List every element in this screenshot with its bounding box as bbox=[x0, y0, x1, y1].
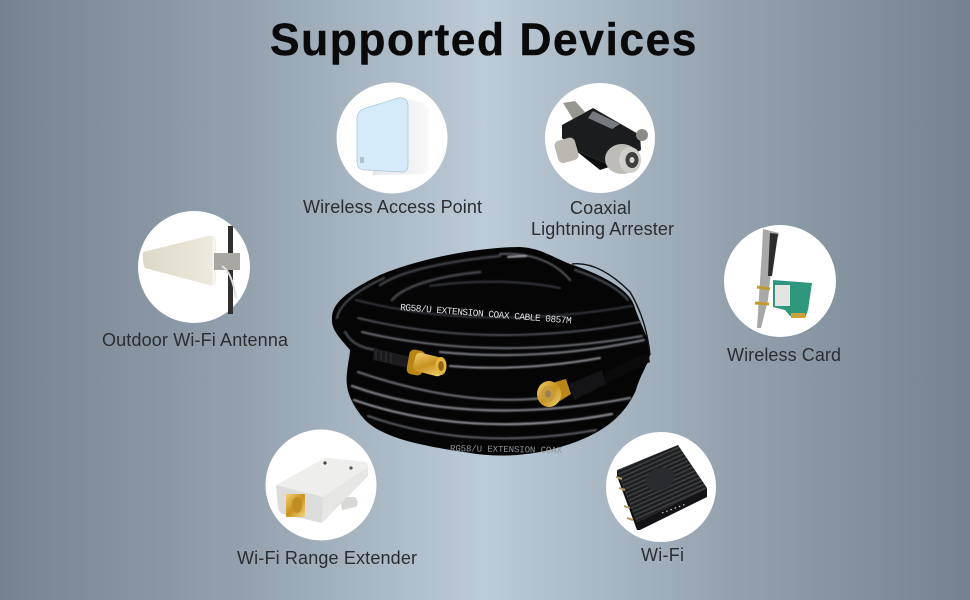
SMA female connector bbox=[373, 348, 446, 377]
device: wi-fi router bbox=[606, 432, 716, 542]
extender icon bbox=[276, 458, 368, 523]
arrester icon bbox=[553, 101, 648, 174]
antenna icon bbox=[143, 226, 240, 314]
label: Wireless Access Point bbox=[303, 197, 482, 217]
label: Outdoor Wi-Fi Antenna bbox=[102, 330, 289, 350]
label: Coaxial bbox=[570, 198, 631, 218]
circle bbox=[606, 432, 716, 542]
title: Supported Devices bbox=[270, 14, 698, 65]
circle bbox=[545, 83, 655, 193]
cable printed text lower: RG58/U EXTENSION COAX bbox=[450, 444, 563, 456]
device: wi-fi range extender bbox=[266, 430, 376, 540]
product photo: coiled coax cable bbox=[332, 247, 650, 456]
circle bbox=[724, 225, 836, 337]
circle bbox=[266, 430, 376, 540]
pcie card icon bbox=[755, 229, 812, 328]
circle bbox=[138, 211, 250, 323]
label: Wi-Fi bbox=[641, 545, 684, 565]
device: coaxial lightning arrester bbox=[545, 83, 655, 193]
cable coil body bbox=[332, 247, 650, 456]
router icon bbox=[357, 98, 429, 175]
device: wireless access point bbox=[336, 82, 448, 194]
cable printed text upper: RG58/U EXTENSION COAX CABLE 0857M bbox=[400, 302, 572, 327]
label: Lightning Arrester bbox=[531, 219, 674, 239]
device: wireless card bbox=[724, 225, 836, 337]
label bbox=[531, 198, 674, 239]
router icon bbox=[616, 445, 707, 530]
device: outdoor wi-fi antenna bbox=[138, 211, 250, 323]
SMA male connector bbox=[537, 353, 650, 407]
circle bbox=[336, 82, 448, 194]
label: Wireless Card bbox=[727, 345, 841, 365]
label: Wi-Fi Range Extender bbox=[237, 548, 417, 568]
